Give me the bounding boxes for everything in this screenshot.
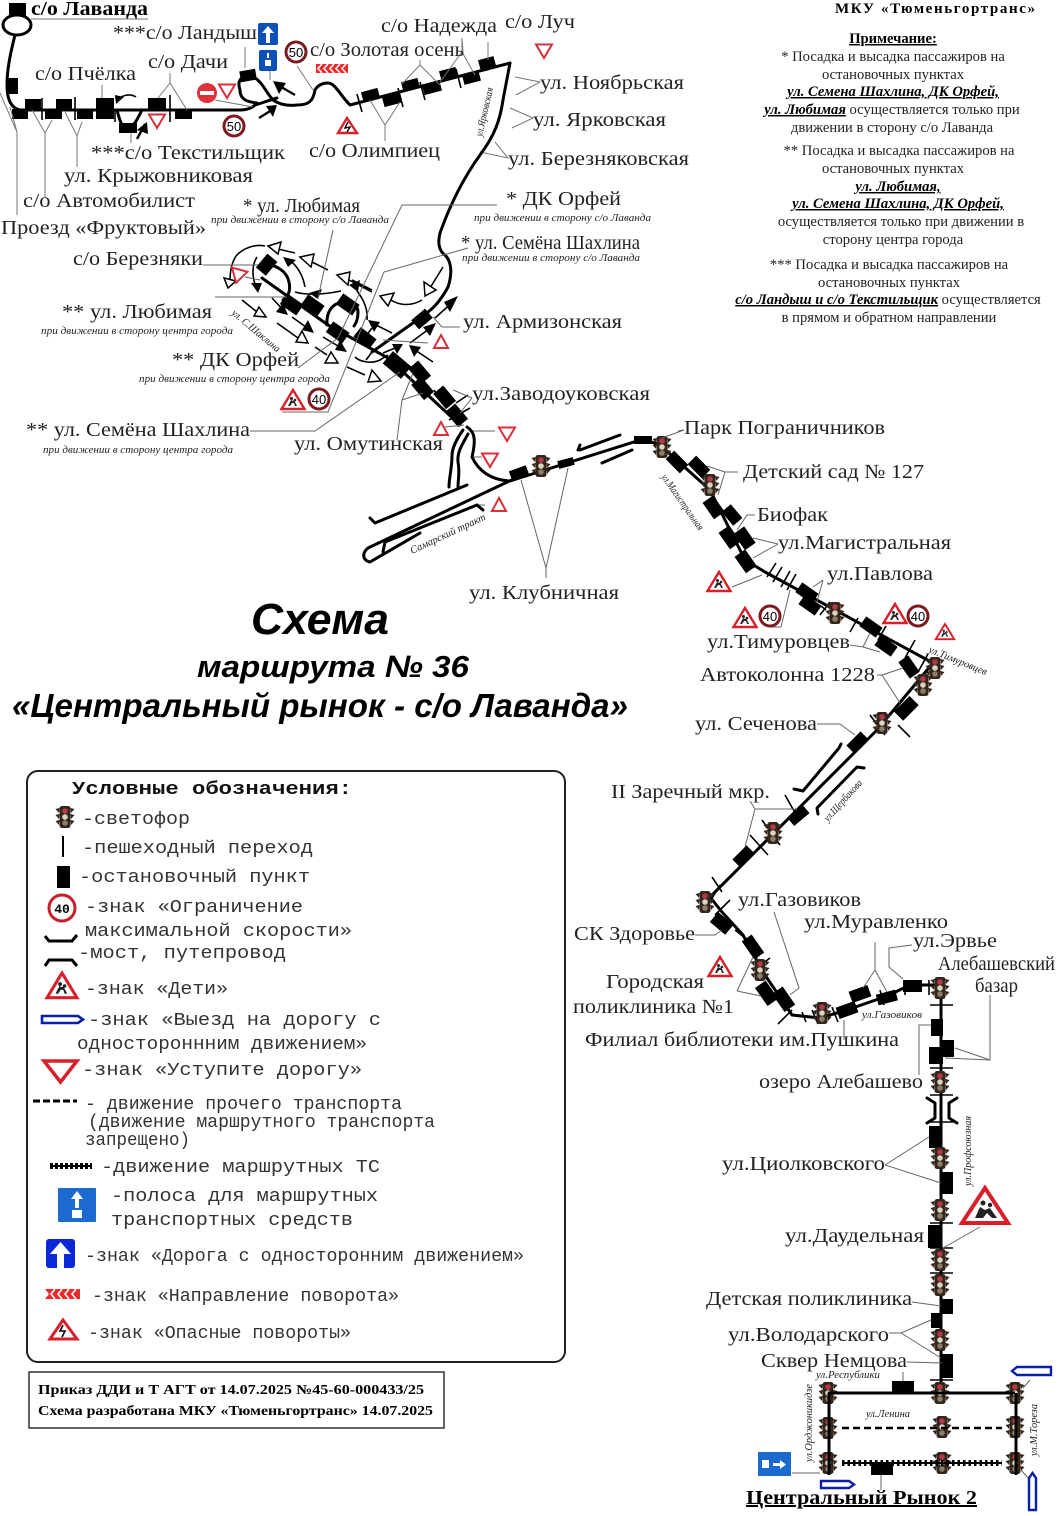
crossings [42, 69, 461, 122]
title: Схема [251, 595, 389, 644]
signs: 40 [763, 609, 777, 624]
road signs on the top road: 50 [227, 119, 241, 134]
notes panel: примечание: *** Посадка и высадка пассажиров на [770, 257, 1009, 273]
labels: Биофак [757, 504, 828, 526]
labels: top road stops [1, 0, 689, 239]
labels: knot stops: ул. С.Шаклина [228, 307, 282, 355]
road signs on the top road [149, 23, 552, 136]
crossings [708, 563, 929, 1024]
labels: knot stops: ул.Ярковская [474, 86, 496, 139]
labels: ул.Магистральная [778, 532, 951, 554]
legend: полоса для маршрутных ТС: транспортных средств [111, 1210, 353, 1231]
roads and bridge [364, 427, 640, 562]
legend: мост, путепровод: -мост, путепровод [78, 943, 286, 964]
labels: Филиал библиотеки им.Пушкина [585, 1029, 899, 1051]
labels: ул.Газовиков [861, 1010, 922, 1021]
labels: top road stops: ул. Ярковская [533, 109, 666, 131]
labels: top road stops: ул. Крыжовниковая [64, 165, 253, 187]
labels: knot stops: ** ДК Орфей [172, 349, 299, 371]
labels: top road stops: с/о Надежда [381, 15, 497, 37]
labels: knot stops: при движении в сторону центра города [139, 374, 330, 385]
labels: Центральный Рынок 2 [746, 1487, 977, 1509]
road line [7, 35, 510, 128]
notes panel: примечание: МКУ «Тюменьгортранс» [835, 1, 1035, 17]
solid arrows [251, 257, 458, 362]
stop and traffic light [509, 436, 652, 482]
labels: ул.Эрвье [913, 930, 997, 952]
labels: Городская [606, 971, 704, 993]
labels: top road stops: ул. Березняковская [508, 148, 689, 170]
stops in the knot [256, 254, 468, 427]
labels: top road stops: с/о Олимпиец [309, 140, 440, 162]
labels: knot stops: * ул. Семёна Шахлина [461, 232, 640, 254]
labels: top road stops: с/о Луч [505, 11, 575, 33]
labels: knot stops: ** ул. Семёна Шахлина [26, 419, 250, 441]
legend: выезд на дорогу с односторонним движением: -знак «Выезд на дорогу с [88, 1010, 381, 1031]
traffic lights [818, 977, 1024, 1474]
labels: поликлиника №1 [573, 996, 734, 1018]
notes panel: примечание: остановочных пунктах [818, 275, 961, 291]
downtown street grid [828, 1393, 1016, 1475]
labels: ул.Орджоникидзе [804, 1384, 815, 1463]
legend: выезд на дорогу с односторонним движением [42, 1010, 381, 1055]
notes panel: примечание [735, 1, 1041, 326]
signs around the knot: 40 [312, 392, 326, 407]
crossings [930, 1005, 953, 1380]
labels: базар [975, 975, 1018, 997]
labels: knot stops: ** ул. Любимая [62, 301, 212, 323]
labels: knot stops: * ул. Любимая [243, 195, 360, 217]
labels: top road stops: ***с/о Ландыш [113, 22, 258, 44]
labels: top road stops: с/о Пчёлка [35, 63, 136, 85]
labels: knot stops: ул. Омутинская [294, 433, 443, 455]
labels [706, 953, 1055, 1509]
legend: полоса для маршрутных ТС: -полоса для маршрутных [111, 1186, 378, 1207]
route map: middle section, Березняки knot to Омутинская [26, 63, 651, 557]
labels: ул.Ленина [865, 1409, 910, 1420]
label: ул. Клубничная [469, 582, 619, 604]
labels: II Заречный мкр. [611, 781, 770, 803]
labels: knot stops: при движении в сторону центра города [43, 445, 233, 456]
labels: top road stops: с/о Золотая осень [310, 39, 464, 61]
labels: knot stops: при движении в сторону с/о Лаванда [474, 213, 651, 224]
callout lines [0, 19, 540, 215]
order info box: Схема разработана МКУ «Тюменьгортранс» 14.07.2025 [38, 1403, 433, 1418]
terminal с/о Лаванда [3, 3, 31, 35]
legend: движение маршрутных ТС: -движение маршрутных ТС [101, 1157, 380, 1178]
labels: ул.Володарского [728, 1324, 889, 1346]
legend: ограничение скорости: максимальной скорости» [85, 921, 352, 942]
labels: top road stops: ***с/о Текстильщик [91, 142, 285, 164]
notes panel: примечание: ул. Семена Шахлина, ДК Орфей, [790, 196, 1004, 212]
labels: top road stops: Проезд «Фруктовый» [1, 217, 206, 239]
road signs on the top road: 50 [289, 45, 303, 60]
notes panel: примечание: Примечание: [849, 31, 937, 47]
notes panel: примечание: ул. Любимая, [853, 179, 941, 195]
callout lines [203, 205, 497, 505]
notes panel: примечание: сторону центра города [823, 232, 964, 248]
route map: Самарский тракт branch and ул. Клубничная [364, 427, 652, 604]
signs: 40 [911, 609, 925, 624]
legend: дорога с односторонним движением [46, 1239, 524, 1268]
bridge brackets [927, 1098, 957, 1123]
labels: ул.Профсоюзная [963, 1116, 974, 1187]
route map: upper section from с/о Лаванда to ул. Березняковская [0, 0, 689, 239]
labels: Сквер Немцова [761, 1350, 907, 1372]
labels: knot stops: с/о Березняки [73, 248, 203, 270]
legend: выезд на дорогу с односторонним движением: одностороннним движением» [77, 1034, 367, 1055]
labels: knot stops [26, 86, 651, 557]
legend: направление поворота: -знак «Направление поворота» [92, 1286, 399, 1307]
labels: ул.М.Тореза [1029, 1404, 1040, 1457]
road line [640, 438, 938, 1018]
notes panel: примечание: движении в сторону с/о Лаванда [791, 120, 994, 136]
labels: ул.Циолковского [722, 1153, 885, 1175]
legend: движение прочего транспорта [33, 1094, 435, 1151]
notes panel: примечание: * Посадка и высадка пассажиров на [781, 49, 1005, 65]
notes panel: примечание: ул. Семена Шахлина, ДК Орфей, [785, 84, 999, 100]
stops [871, 1019, 954, 1475]
legend: дети [47, 973, 228, 1000]
order info box: Приказ ДДИ и Т АГТ от 14.07.2025 №45-60-000433/25 [38, 1382, 424, 1397]
legend: дети: -знак «Дети» [85, 979, 228, 1000]
legend: остановочный пункт: -остановочный пункт [79, 867, 310, 888]
callout lines [662, 430, 912, 1040]
labels: ул.Щербакова [821, 778, 865, 825]
labels: ул.Павлова [827, 563, 933, 585]
legend: движение прочего транспорта: - движение прочего транспорта [85, 1094, 402, 1115]
legend: светофор: -светофор [82, 809, 190, 830]
legend: движение прочего транспорта: запрещено) [85, 1130, 190, 1151]
crossings [363, 328, 470, 420]
labels: top road stops: ул. Ноябрьская [540, 72, 684, 94]
labels: knot stops: при движении в сторону с/о Лаванда [462, 253, 640, 264]
legend panel [27, 771, 565, 1362]
labels: knot stops: * ДК Орфей [506, 188, 621, 210]
labels: ул.Республики [815, 1370, 880, 1381]
labels: top road stops: с/о Дачи [148, 51, 228, 73]
legend: светофор [56, 806, 190, 830]
route map: vertical section along ул. Профсоюзная to Центральный рынок [706, 953, 1055, 1510]
order info box [29, 1372, 444, 1428]
callout: ул. Клубничная [521, 468, 568, 578]
labels: озеро Алебашево [759, 1071, 923, 1093]
labels: СК Здоровье [574, 923, 695, 945]
legend: пешеходный переход: -пешеходный переход [82, 838, 313, 859]
legend: дорога с односторонним движением: -знак «Дорога с односторонним движением» [85, 1246, 524, 1267]
legend: ограничение скорости: -знак «Ограничение [85, 897, 303, 918]
notes panel: примечание: остановочных пунктах [822, 67, 965, 83]
notes panel: примечание: в прямом и обратном направлении [782, 310, 997, 326]
title: «Центральный рынок - с/о Лаванда» [12, 687, 628, 724]
labels: ул.Муравленко [804, 911, 948, 933]
traffic lights [652, 436, 944, 1024]
route map: right diagonal from Парк Пограничников to Газовиков [573, 417, 997, 1051]
title [12, 595, 628, 724]
signs [708, 572, 954, 976]
labels: knot stops: ул.Заводоуковская [472, 383, 650, 405]
road line [230, 63, 510, 425]
labels: knot stops: ул. Армизонская [463, 311, 622, 333]
legend: движение прочего транспорта: (движение маршрутного транспорта [88, 1112, 435, 1133]
legend: уступите дорогу: -знак «Уступите дорогу» [82, 1060, 362, 1081]
labels: top road stops: с/о Автомобилист [23, 190, 195, 212]
callout lines [792, 995, 1030, 1490]
notes panel: примечание: ** Посадка и высадка пассажиров на [784, 143, 1015, 159]
labels: Детский сад № 127 [743, 461, 924, 483]
labels: ул.Магистральная [658, 472, 705, 533]
signs around the knot [228, 268, 515, 511]
legend: полоса для маршрутных ТС [58, 1186, 378, 1231]
road [940, 990, 942, 1392]
labels [573, 417, 997, 1051]
labels: knot stops: при движении в сторону с/о Лаванда [211, 215, 389, 226]
parallel overpass lines [794, 744, 864, 814]
notes panel: примечание: остановочных пунктах [822, 161, 965, 177]
labels: ул. Сеченова [695, 713, 817, 735]
labels: ул.Тимуровцев [926, 644, 989, 678]
labels: knot stops: Самарский тракт [409, 512, 488, 557]
legend: мост, путепровод [45, 935, 286, 966]
stops [666, 451, 922, 1019]
labels: Детская поликлиника [706, 1288, 912, 1310]
outline arrows [224, 242, 443, 382]
legend: опасные повороты: -знак «Опасные повороты» [88, 1323, 351, 1344]
notes panel: примечание: с/о Ландыш и с/о Текстильщик осуществляется [735, 292, 1041, 308]
stops along the top road [7, 56, 496, 133]
legend heading: Условные обозначения: [72, 779, 352, 800]
labels: ул.Даудельная [785, 1225, 924, 1247]
notes panel: примечание: ул. Любимая осуществляется только при [762, 102, 1020, 118]
direction arrows [115, 81, 295, 139]
labels: ул.Тимуровцев [707, 631, 850, 653]
labels: ул.Газовиков [738, 889, 861, 911]
legend: ограничение скорости [49, 895, 352, 942]
title: маршрута № 36 [197, 649, 470, 684]
labels: Парк Пограничников [684, 417, 885, 439]
legend: ограничение скорости: 40 [54, 902, 70, 917]
labels: knot stops: при движении в сторону центра города [41, 326, 233, 337]
labels: Автоколонна 1228 [700, 664, 875, 686]
signs [758, 1188, 1051, 1510]
notes panel: примечание: осуществляется только при движении в [778, 214, 1024, 230]
